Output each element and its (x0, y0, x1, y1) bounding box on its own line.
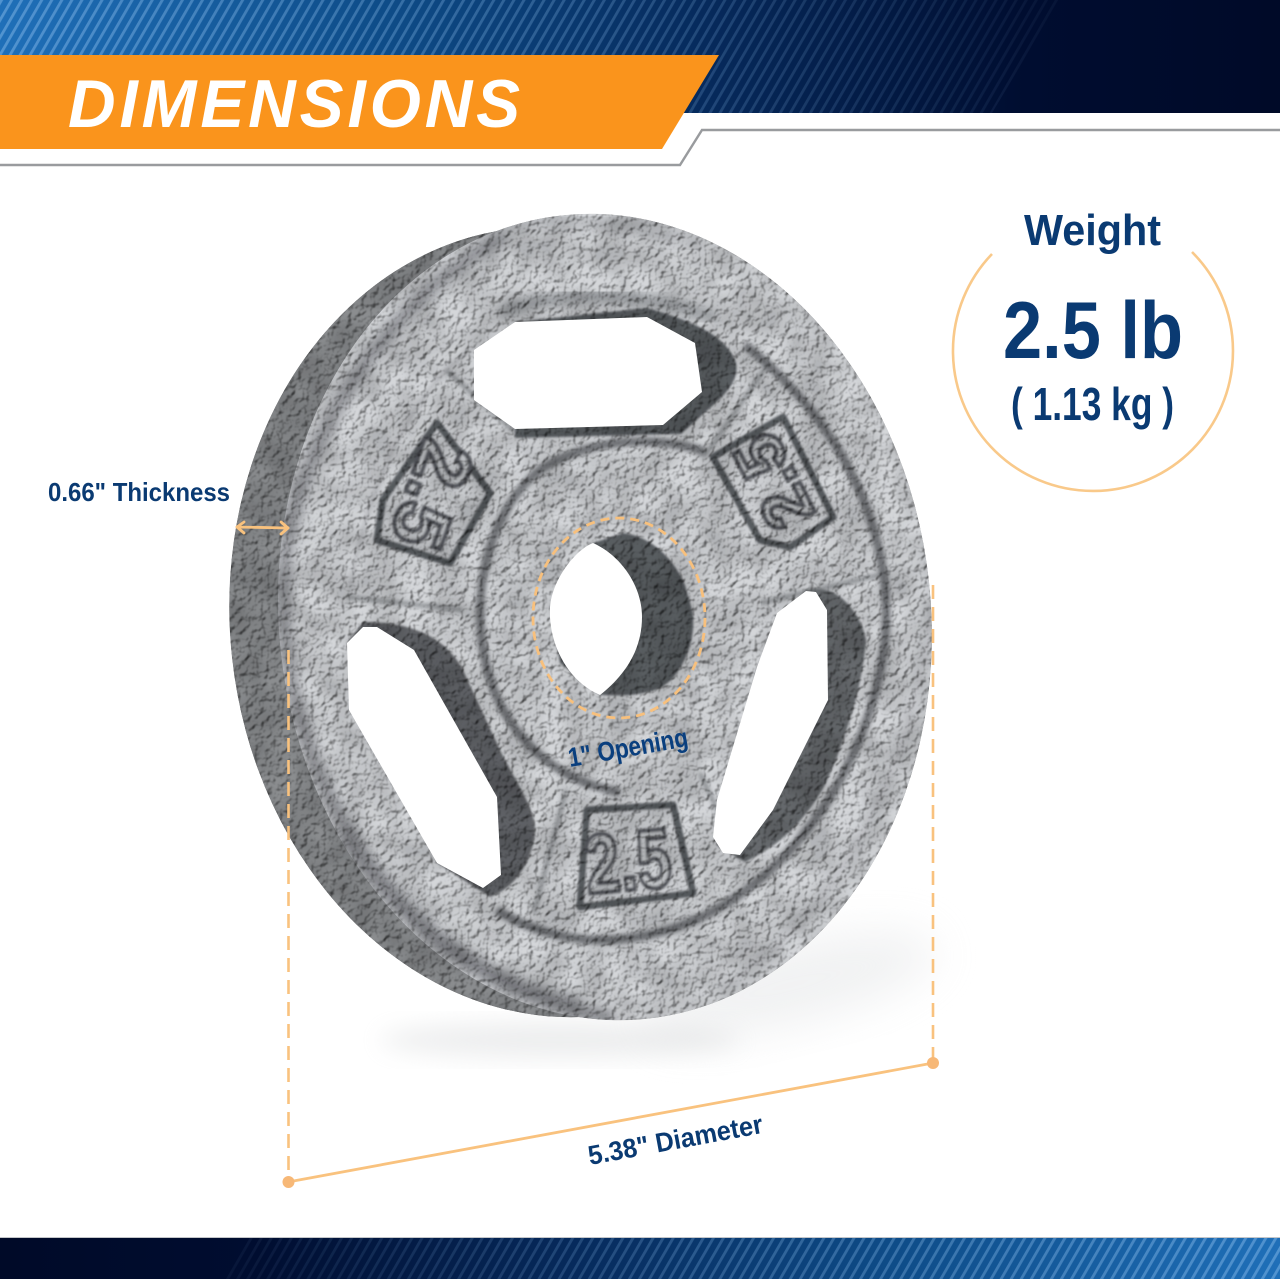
hub shadow arc (480, 441, 705, 792)
diameter left dashed line (287, 650, 290, 1180)
inner hole shadows (515, 308, 737, 438)
weight plate (229, 214, 932, 1020)
weight callout (953, 206, 1233, 491)
thickness arrow (237, 522, 288, 534)
weight ring (953, 252, 1233, 491)
front face edge shading (283, 236, 612, 1018)
title banner (0, 55, 719, 149)
title: DIMENSIONS (68, 66, 524, 142)
plate floor shadow (380, 910, 945, 1060)
top header band (0, 0, 1280, 113)
diameter label: 5.38" Diameter (586, 1109, 766, 1171)
weight kilograms: ( 1.13 kg ) (1011, 378, 1174, 430)
header outline (0, 130, 1280, 165)
rim groove (497, 345, 886, 940)
weight pounds: 2.5 lb (1003, 286, 1183, 376)
plate front face (239, 181, 971, 1053)
opening dashed circle (533, 518, 705, 718)
spokes (347, 363, 880, 913)
diameter line with end dots (282, 1057, 939, 1188)
tile right: 2.5 (718, 422, 830, 542)
hub (457, 422, 783, 808)
centre bore shadow (550, 533, 693, 695)
bottom band (0, 1237, 1280, 1279)
thickness label: 0.66" Thickness (48, 477, 230, 507)
plate side edge (190, 194, 926, 1050)
weight heading: Weight (1024, 206, 1161, 255)
diameter right dashed line (932, 585, 934, 1062)
tile bottom: 2.5 (581, 810, 675, 912)
opening label: 1" Opening (566, 722, 690, 773)
plate openings (347, 317, 828, 888)
tile left: 2.5 (373, 429, 490, 560)
